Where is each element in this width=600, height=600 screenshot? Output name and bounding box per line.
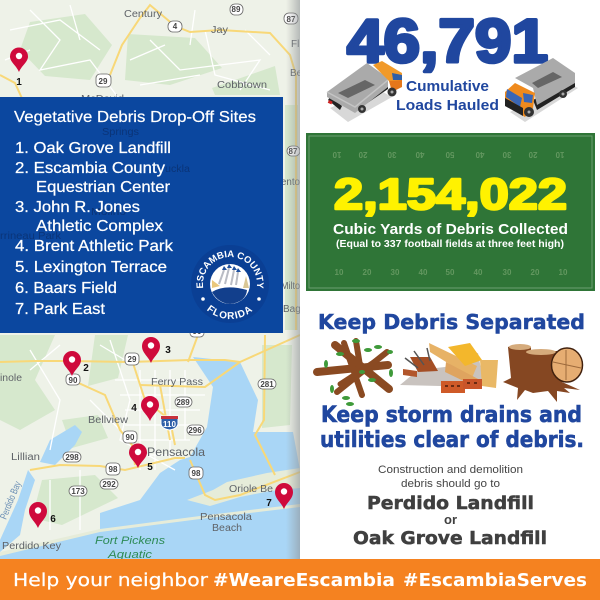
logo: Escambia County Florida seal [191, 245, 269, 323]
pin 4 [131, 396, 159, 421]
pin 1 [10, 48, 28, 88]
map place labels: McDavid [81, 94, 124, 105]
map place labels: Allento [270, 177, 300, 188]
map place labels: Jay [211, 25, 228, 36]
icon: dump truck right [505, 58, 578, 122]
yard numbers top: 20 [358, 150, 367, 159]
yard numbers top: 50 [445, 150, 454, 159]
text: landfill destinations: Oak Grove Landfill [353, 528, 547, 549]
icon: dump truck left [327, 61, 402, 122]
list of sites: 7. Park East [15, 301, 106, 318]
yard numbers bottom: 30 [391, 268, 400, 277]
yard numbers top: 10 [332, 150, 341, 159]
text: landfill destinations: Perdido Landfill [367, 493, 534, 514]
map place labels: Century [124, 9, 162, 20]
text: landfill destinations [353, 493, 547, 549]
map place labels: Milto [281, 281, 300, 292]
list of sites: 5. Lexington Terrace [15, 259, 167, 276]
caption: cumulative loads hauled: Cumulative [406, 78, 489, 95]
yard numbers bottom: 20 [531, 268, 540, 277]
heading: keep storm drains clear [320, 403, 584, 453]
map labels showing through panel: uckla [165, 164, 190, 175]
map place labels: Aquatic [107, 549, 153, 561]
list of sites: Equestrian Center [36, 179, 171, 196]
map background [0, 0, 303, 561]
map place labels: Be [290, 68, 303, 79]
pin 4: 4 [131, 403, 137, 414]
map place labels: Pensacola [200, 512, 252, 523]
list of sites: 1. Oak Grove Landfill [15, 140, 171, 157]
map place labels: inole [0, 373, 22, 384]
icon: tree stumps [503, 344, 582, 402]
road shields [63, 4, 300, 496]
list of sites: 2. Escambia County [15, 160, 165, 177]
pin 3 [142, 337, 171, 363]
map place labels: Bellview [88, 415, 129, 426]
big number: cubic yards: 2,154,022 [334, 170, 567, 219]
big number: loads hauled: 46,791 [347, 7, 548, 75]
yard numbers bottom: 10 [559, 268, 568, 277]
yellow highways [0, 5, 300, 500]
panel: vegetative debris drop-off sites [0, 97, 283, 333]
map labels showing through panel: Molino [91, 207, 127, 218]
caption: cumulative loads hauled: Loads Hauled [396, 97, 499, 114]
map labels showing through panel [0, 127, 190, 242]
footer banner: #WeareEscambia [213, 570, 395, 591]
map background: 289 [176, 398, 190, 407]
pin 6 [29, 502, 56, 528]
white road network [5, 5, 270, 530]
logo: Escambia County Florida seal: FLORIDA [206, 304, 252, 320]
interstate 110 shield [161, 416, 178, 430]
pin 6: 6 [50, 514, 56, 525]
heading: keep debris separated: Keep Debris Separated [318, 310, 585, 334]
yard numbers top [332, 150, 564, 159]
footer banner: Help your neighbor [13, 570, 209, 591]
text: construction and demolition: debris should go to [401, 478, 500, 490]
icon: construction rubble [400, 343, 498, 393]
panel: football field [306, 133, 595, 291]
map background: 90 [193, 327, 202, 336]
interstate 110 shield: 110 [163, 420, 177, 429]
logo: Escambia County Florida seal: ESCAMBIA COUNTY [196, 250, 264, 288]
map background: 29 [99, 77, 108, 86]
list of sites [15, 140, 174, 318]
map place labels: Bag [283, 304, 301, 315]
list of sites: 6. Baars Field [15, 280, 117, 297]
map place labels: Cobbtown [217, 80, 267, 91]
pin 2 [63, 351, 89, 376]
text: landfill destinations: or [444, 512, 457, 527]
list of sites: 3. John R. Jones [15, 199, 140, 216]
pin 7 [266, 483, 293, 509]
caption: cubic yards of debris collected: Cubic Yards of Debris Collected [333, 221, 568, 238]
text: construction and demolition [378, 464, 523, 490]
icon: branches [317, 339, 393, 406]
map background: 298 [65, 453, 79, 462]
map labels showing through panel: rrineau Park [0, 231, 62, 242]
map background: 4 [173, 22, 178, 31]
map background: 173 [71, 487, 85, 496]
map background: 281 [260, 380, 274, 389]
yard numbers bottom: 30 [503, 268, 512, 277]
yard numbers bottom: 50 [446, 268, 455, 277]
panel heading: Vegetative Debris Drop-Off Sites [14, 109, 256, 126]
map place labels: Ferry Pass [151, 377, 203, 388]
map place labels: Pensacola [147, 445, 205, 459]
pin 2: 2 [83, 363, 89, 374]
map background: 87 [289, 147, 298, 156]
map background: 292 [102, 480, 116, 489]
footer banner: #EscambiaServes [403, 570, 587, 591]
map background: 29 [128, 355, 137, 364]
yard numbers bottom: 20 [363, 268, 372, 277]
yard numbers top: 30 [387, 150, 396, 159]
map background: 87 [287, 15, 296, 24]
yard numbers bottom: 10 [335, 268, 344, 277]
footer banner [0, 559, 600, 600]
map background: 90 [69, 376, 78, 385]
yard numbers top: 40 [475, 150, 484, 159]
map background: 98 [109, 465, 118, 474]
heading: keep storm drains clear: Keep storm drains and [321, 403, 582, 428]
yard numbers bottom: 40 [419, 268, 428, 277]
list of sites: Athletic Complex [36, 218, 163, 235]
map background: 98 [192, 469, 201, 478]
map place labels: Oriole Be [229, 484, 273, 495]
map place labels: Lillian [11, 452, 40, 463]
right edge shading [286, 0, 300, 559]
pin 5 [129, 444, 153, 473]
map background: 296 [188, 426, 202, 435]
map labels showing through panel: Springs [102, 127, 139, 138]
yard numbers top: 40 [415, 150, 424, 159]
map place labels: Beach [212, 523, 242, 534]
text: construction and demolition: Construction and demolition [378, 464, 523, 476]
list of sites: 4. Brent Athletic Park [15, 238, 174, 255]
pin 7: 7 [266, 498, 272, 509]
yard numbers bottom [335, 268, 568, 277]
yard numbers top: 10 [555, 150, 564, 159]
map background: 90 [126, 433, 135, 442]
caption: cumulative loads hauled [396, 78, 499, 114]
pin 3: 3 [165, 345, 171, 356]
pin 1: 1 [16, 77, 22, 88]
map place labels: Fort Pickens [95, 535, 166, 547]
map background: 89 [232, 5, 241, 14]
green land patches [0, 14, 298, 525]
yard numbers top: 20 [528, 150, 537, 159]
map place labels [0, 9, 303, 561]
right column background [300, 0, 600, 559]
yard numbers top: 30 [502, 150, 511, 159]
peninsula and barrier island [0, 468, 300, 556]
note: equal to football fields: (Equal to 337 football fields at three feet high) [336, 238, 564, 250]
map place labels: Fl [291, 39, 299, 50]
pin 5: 5 [147, 462, 153, 473]
map place labels: Perdido Key [2, 541, 61, 552]
water [0, 357, 300, 559]
yard numbers bottom: 40 [474, 268, 483, 277]
